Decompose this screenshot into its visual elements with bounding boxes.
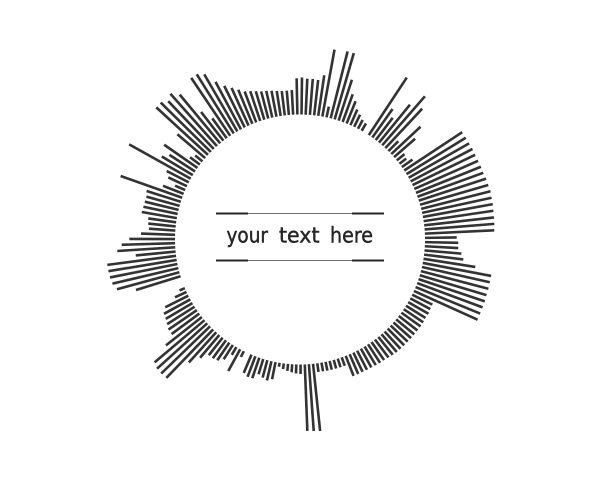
title text: text [279, 223, 320, 247]
top rule above title [216, 212, 384, 214]
bottom rule below title [216, 260, 384, 262]
circular bar chart ring [107, 50, 494, 431]
title text: here [330, 223, 373, 247]
title text: your [226, 223, 268, 247]
